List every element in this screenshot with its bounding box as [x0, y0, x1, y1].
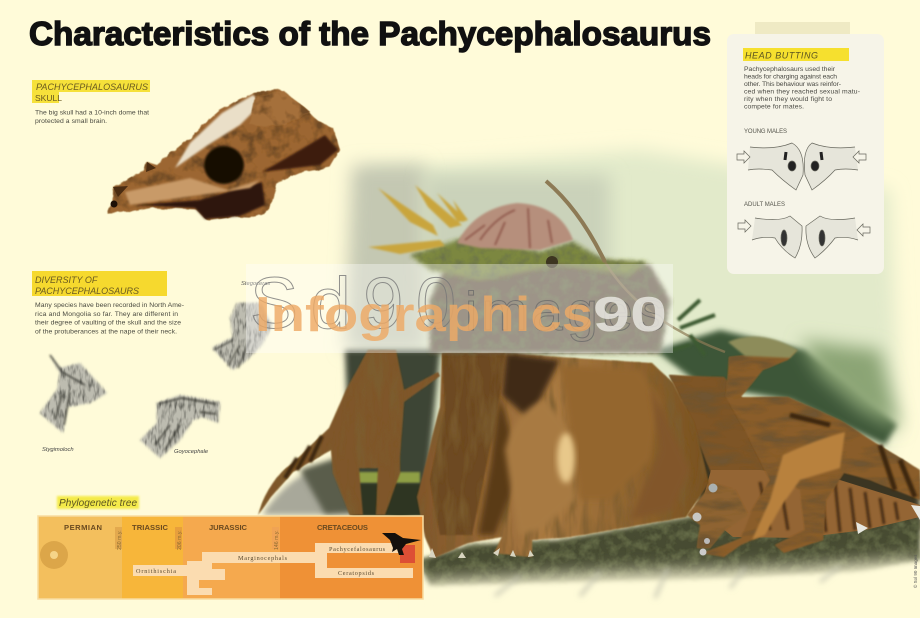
sketch: young males [737, 143, 866, 190]
illustration: claws and feet [429, 483, 748, 558]
card [727, 34, 884, 274]
text: head butting description: ced when they reached sexual matu- [744, 88, 860, 96]
heading: skull: SKULL [35, 93, 62, 103]
heading: skull [32, 80, 150, 103]
arrow: right [738, 220, 751, 232]
text: diversity description: rica and Mongolia so far. They are different in [35, 311, 178, 318]
period labels: JURASSIC [209, 523, 248, 532]
red highlight [400, 545, 415, 563]
watermark: Sd90 [250, 264, 456, 344]
arrow: left [857, 224, 870, 236]
text: diversity description: Many species have been recorded in North Ame- [35, 302, 184, 309]
illustration: right dinosaur [703, 337, 920, 557]
panel: diversity [32, 271, 272, 458]
text: head butting description: heads for charging against each [744, 74, 837, 80]
text: head butting description: other. This behaviour was reinfor- [744, 81, 841, 88]
credit: © Sol 90 Images [912, 554, 918, 588]
panel: skull [32, 80, 340, 220]
panel: phylogenetic tree [38, 496, 423, 599]
period labels [64, 523, 368, 532]
sketch: adult males [738, 216, 870, 258]
text: head butting description: rity when they would fight to [744, 96, 832, 103]
age labels: 250 m.y. [117, 530, 123, 550]
watermark [246, 264, 673, 353]
heading: diversity [32, 271, 167, 296]
panel: head butting card [727, 22, 884, 274]
title: Characteristics of the Pachycephalosaurus [29, 15, 711, 52]
text: skull description: The big skull had a 10-inch dome that [35, 110, 149, 116]
tree branches [133, 543, 413, 595]
watermark: 90 [593, 288, 667, 342]
text: head butting description: Pachycephalosaurs used their [744, 66, 836, 73]
branch labels: Pachycefalosaurus [329, 546, 386, 553]
timeline chart [38, 516, 423, 599]
age labels: 146 m.y. [274, 530, 280, 550]
illustration: left dinosaur [258, 350, 440, 515]
label: young males: YOUNG MALES [744, 129, 787, 135]
tape [755, 22, 850, 37]
illustration: lying dinosaur tail [700, 470, 920, 538]
sketch: Goyocephale [140, 395, 220, 458]
sketch: Stygimoloch: Stygimoloch [42, 447, 74, 453]
heading: diversity: DIVERSITY OF [35, 275, 98, 285]
heading: phylogenetic tree: Phylogenetic tree [59, 498, 137, 509]
origin target icon [40, 541, 68, 569]
arrow: right [737, 151, 750, 163]
branch labels: Marginocephals [238, 555, 288, 562]
dark shade behind the right dinosaurs [695, 420, 920, 560]
sketch: Stegoceras [212, 281, 272, 370]
period labels: TRIASSIC [132, 523, 169, 532]
heading: head butting: HEAD BUTTING [745, 50, 818, 60]
branch labels: Ornithischia [136, 568, 176, 575]
heading: skull: PACHYCEPHALOSAURUS [36, 82, 148, 92]
watermark: images [465, 280, 665, 342]
sketch: Stygimoloch [40, 355, 107, 453]
arrow: left [853, 151, 866, 163]
illustration: ground [420, 515, 920, 618]
text: diversity description: of the protuberances at the nape of their neck. [35, 328, 177, 336]
age labels [115, 527, 280, 550]
image: skull [107, 90, 340, 220]
heading: head butting [743, 48, 849, 61]
branch labels [136, 546, 386, 577]
sketch: Goyocephale: Goyocephale [174, 449, 209, 455]
branch labels: Ceratopsids [338, 570, 375, 577]
watermark: Infographics [255, 288, 593, 342]
icon: dinosaur silhouette [382, 533, 421, 555]
heading: diversity: PACHYCEPHALOSAURS [35, 286, 139, 296]
period labels: CRETACEOUS [317, 523, 368, 532]
illustration: branch [546, 181, 725, 355]
sketch: Stegoceras: Stegoceras [241, 281, 270, 287]
illustration: yellow head spines [368, 185, 468, 254]
text: diversity description: their degree of vaulting of the skull and the size [35, 320, 181, 326]
illustration: forest backdrop [262, 150, 920, 560]
text: skull description: protected a small brain. [35, 118, 107, 125]
age labels: 206 m.y. [177, 530, 183, 550]
text: head butting description: compete for mates. [744, 104, 804, 110]
illustration: main dinosaur body [417, 353, 709, 558]
period labels: PERMIAN [64, 523, 102, 532]
illustration: main dinosaur head [410, 203, 670, 353]
illustration: right dinosaur rear body [669, 375, 800, 500]
label: adult males: ADULT MALES [744, 202, 785, 208]
